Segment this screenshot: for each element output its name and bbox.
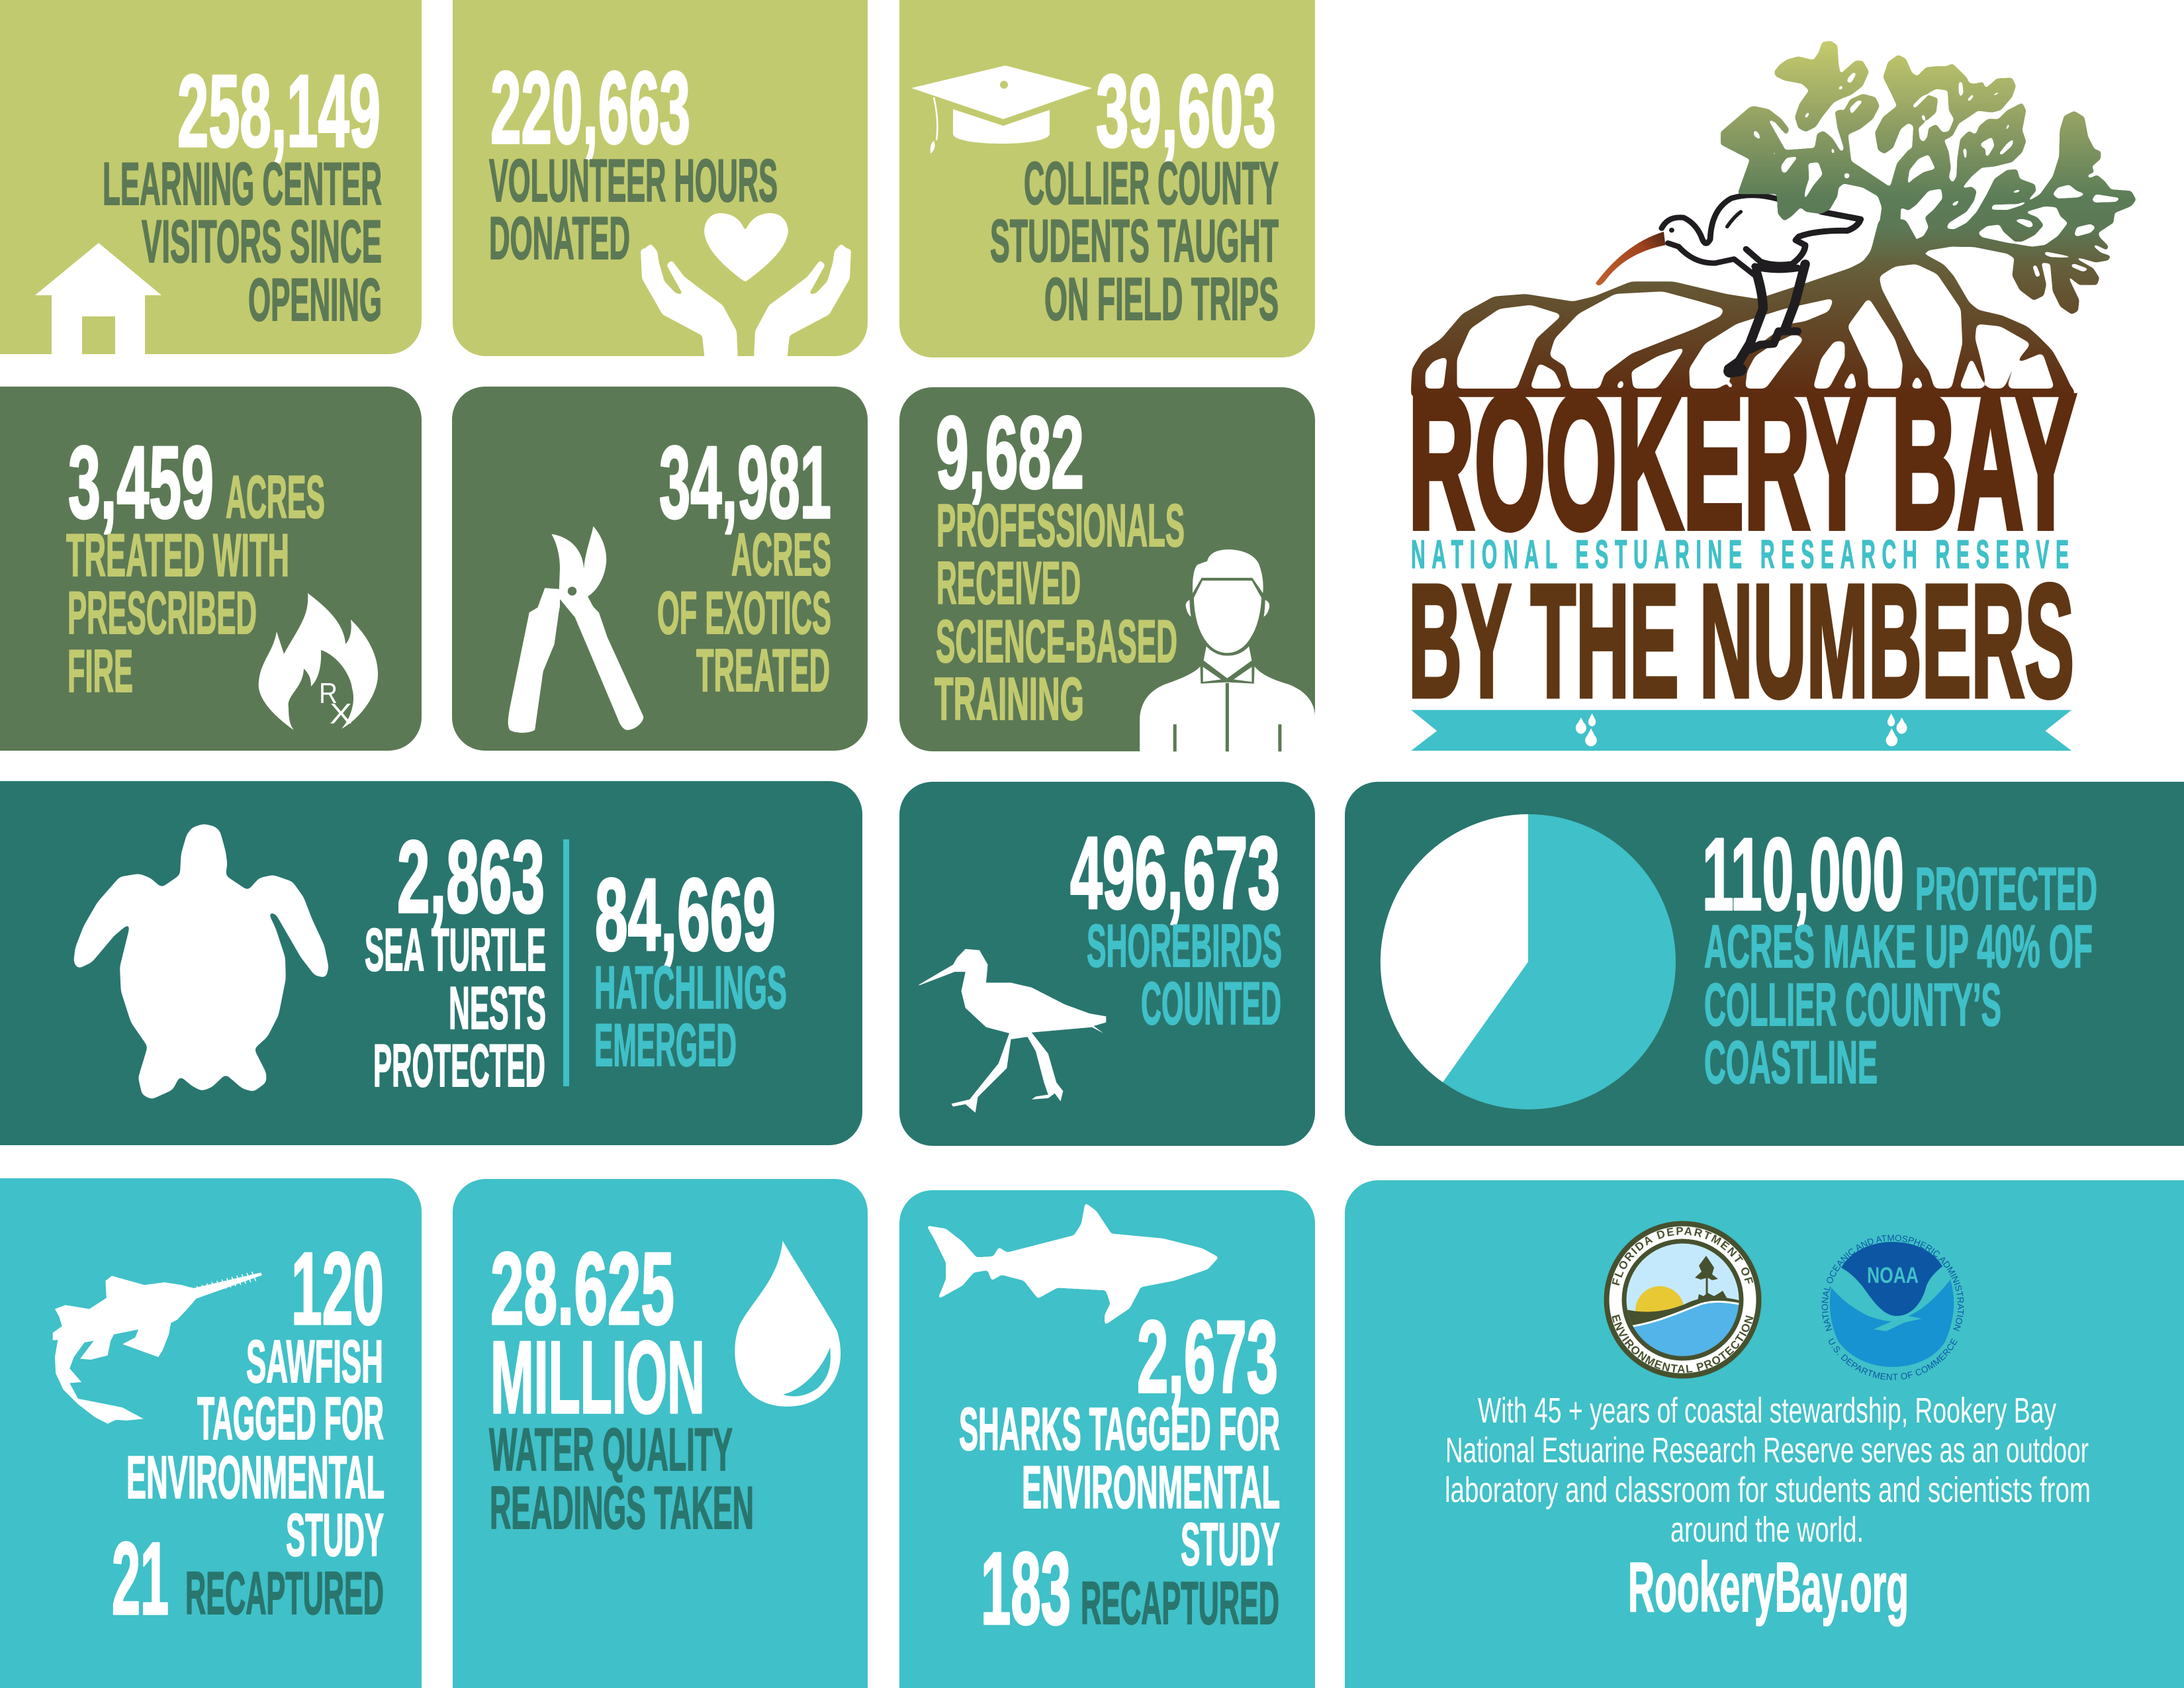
panel: sea turtles	[0, 781, 862, 1145]
text block: about Rookery Bay	[1445, 1391, 2091, 1550]
icon: flame with Rx	[259, 593, 378, 730]
illustration: mangrove roots	[1411, 219, 2074, 397]
panel: shorebirds: COUNTED	[1141, 970, 1281, 1037]
stat number: 34,981: 34,981	[659, 425, 831, 539]
panel: sharks: STUDY	[1181, 1511, 1280, 1578]
panel: exotics treated: OF EXOTICS	[657, 580, 831, 647]
logo: NOAA: NATIONAL OCEANIC AND ATMOSPHERIC ADMINISTRATION	[1821, 1235, 1964, 1331]
panel: sea turtles: PROTECTED	[373, 1033, 545, 1100]
label: hatchlings emerged: EMERGED	[594, 1012, 737, 1079]
icon: shorebird	[919, 949, 1106, 1113]
illustration: ibis bird	[1596, 195, 1862, 371]
stat number: 9,682: 9,682	[936, 395, 1084, 510]
label: volunteer hours donated: DONATED	[489, 205, 630, 272]
stat number: 183: 183	[981, 1531, 1071, 1646]
panel: water quality	[453, 1179, 868, 1688]
label: water quality readings taken	[489, 1417, 754, 1542]
label: sawfish tagged for environmental study	[126, 1329, 385, 1569]
panel: prescribed fire	[0, 387, 422, 751]
label: learning center visitors since opening	[103, 151, 382, 334]
panel: collier county students: STUDENTS TAUGHT	[990, 208, 1279, 275]
panel: exotics treated: ACRES	[731, 522, 831, 588]
panel: sawfish: ENVIRONMENTAL	[126, 1444, 385, 1511]
icon: sawfish	[53, 1272, 262, 1424]
panel: sawfish: STUDY	[286, 1502, 384, 1569]
stat number: 496,673: 496,673	[1070, 816, 1280, 930]
icon: water drop	[735, 1241, 841, 1407]
label: acres treated with prescribed fire: FIRE	[68, 638, 133, 705]
label: shorebirds counted	[1087, 913, 1282, 1037]
panel: learning center visitors: OPENING	[248, 267, 382, 334]
panel: prescribed fire: ACRES	[226, 464, 325, 531]
panel: water quality: READINGS TAKEN	[490, 1475, 754, 1542]
panel: shorebirds	[899, 782, 1315, 1146]
panel: professionals trained	[899, 387, 1315, 751]
panel: collier county students: ON FIELD TRIPS	[1044, 266, 1279, 333]
logo: NOAA	[1821, 1235, 1964, 1380]
label: collier county students taught on field trips	[990, 150, 1279, 333]
panel: collier county students: COLLIER COUNTY	[1024, 150, 1279, 217]
stat number: 3,459: 3,459	[68, 425, 214, 539]
panel: sawfish: 21	[112, 1521, 169, 1636]
icon: flame with Rx: X	[330, 698, 352, 730]
icon: hands holding heart	[641, 213, 851, 361]
icon: person	[1140, 549, 1315, 751]
panel: sharks: ENVIRONMENTAL	[1022, 1454, 1280, 1521]
stat number: 220,663: 220,663	[490, 50, 690, 165]
label: sawfish tagged for environmental study: SAWFISH	[246, 1329, 383, 1395]
pie chart: 40 percent of coastline	[1381, 814, 1676, 1109]
label: professionals received science-based training: TRAINING	[934, 666, 1084, 733]
panel: sea turtles: SEA TURTLE	[365, 917, 546, 984]
panel: sawfish: TAGGED FOR	[197, 1385, 384, 1452]
logo: Florida Department of Environmental Protection	[1604, 1221, 1762, 1378]
stat number: 84,669: 84,669	[595, 857, 776, 972]
label: protected acres make up 40% of collier county's coastline	[1704, 856, 2097, 1096]
label: sharks tagged for environmental study	[959, 1396, 1280, 1578]
logo: Florida Department of Environmental Protection: ENVIRONMENTAL PROTECTION	[1612, 1315, 1754, 1373]
panel: learning center visitors: VISITORS SINCE	[142, 209, 382, 275]
panel: exotics treated	[452, 387, 868, 751]
panel: learning center visitors: LEARNING CENTER	[103, 151, 382, 218]
stat number: 2,863: 2,863	[397, 820, 545, 934]
panel: professionals trained: PROFESSIONALS	[936, 492, 1185, 559]
stat number: million: MILLION	[490, 1320, 705, 1434]
panel: collier county students	[899, 0, 1315, 357]
illustration: mangrove foliage	[1721, 41, 2136, 314]
stat number: 110,000: 110,000	[1702, 817, 1904, 931]
stat number: 258,149: 258,149	[177, 54, 381, 168]
stat number: 120: 120	[291, 1231, 384, 1346]
icon: sea turtle	[73, 824, 329, 1100]
panel: shorebirds: SHOREBIRDS	[1087, 913, 1282, 980]
stat number: 28.625: 28.625	[490, 1231, 674, 1346]
panel: volunteer hours	[453, 0, 868, 361]
label: professionals received science-based training: RECEIVED	[936, 550, 1081, 617]
logo: Rookery Bay mangrove and ibis	[1408, 41, 2136, 751]
website link text: RookeryBay.org	[1628, 1548, 1909, 1626]
text block: about Rookery Bay: around the world.	[1670, 1510, 1864, 1550]
logo: Florida Department of Environmental Protection: FLORIDA DEPARTMENT OF	[1612, 1227, 1754, 1286]
label: volunteer hours donated	[489, 148, 778, 272]
label: acres treated with prescribed fire	[66, 464, 325, 705]
panel: volunteer hours: VOLUNTEER HOURS	[489, 148, 778, 214]
icon: shark	[927, 1203, 1219, 1325]
label: acres treated with prescribed fire: TREATED WITH	[66, 522, 289, 589]
panel: exotics treated: TREATED	[696, 637, 830, 704]
stat number: 39,603: 39,603	[1096, 54, 1276, 168]
panel: sawfish: RECAPTURED	[185, 1560, 384, 1627]
panel: sawfish	[0, 1178, 422, 1688]
panel: sea turtles: HATCHLINGS	[594, 955, 787, 1021]
panel: sharks: RECAPTURED	[1081, 1570, 1279, 1637]
icon: house	[35, 243, 161, 354]
icon: graduation cap	[911, 66, 1092, 154]
label: protected acres make up 40% of collier county's coastline: COASTLINE	[1704, 1029, 1878, 1096]
subtitle: National Estuarine Research Reserve: NATIONAL ESTUARINE RESEARCH RESERVE	[1411, 533, 2069, 577]
label: acres of exotics treated	[657, 522, 831, 704]
logo: NOAA: U.S. DEPARTMENT OF COMMERCE	[1829, 1338, 1958, 1380]
stat number: 2,673: 2,673	[1137, 1299, 1278, 1414]
panel: sharks: SHARKS TAGGED FOR	[959, 1396, 1280, 1463]
panel: protected coastline	[1345, 782, 2184, 1146]
panel: sea turtles: NESTS	[449, 975, 546, 1042]
panel: sharks	[899, 1190, 1315, 1688]
logo: NOAA: NOAA	[1867, 1263, 1919, 1288]
icon: pruning shears	[508, 526, 643, 733]
label: professionals received science-based training	[934, 492, 1185, 733]
banner with droplets	[1411, 710, 2071, 751]
panel: about and logos	[1345, 1180, 2184, 1688]
panel: professionals trained: SCIENCE-BASED	[936, 608, 1177, 675]
label: acres treated with prescribed fire: PRESCRIBED	[68, 580, 257, 647]
panel: learning center visitors	[0, 0, 422, 354]
label: sea turtle nests protected	[365, 917, 546, 1100]
label: hatchlings emerged	[594, 955, 787, 1079]
label: water quality readings taken: WATER QUALITY	[489, 1417, 733, 1483]
icon: flame with Rx: R	[319, 677, 338, 710]
